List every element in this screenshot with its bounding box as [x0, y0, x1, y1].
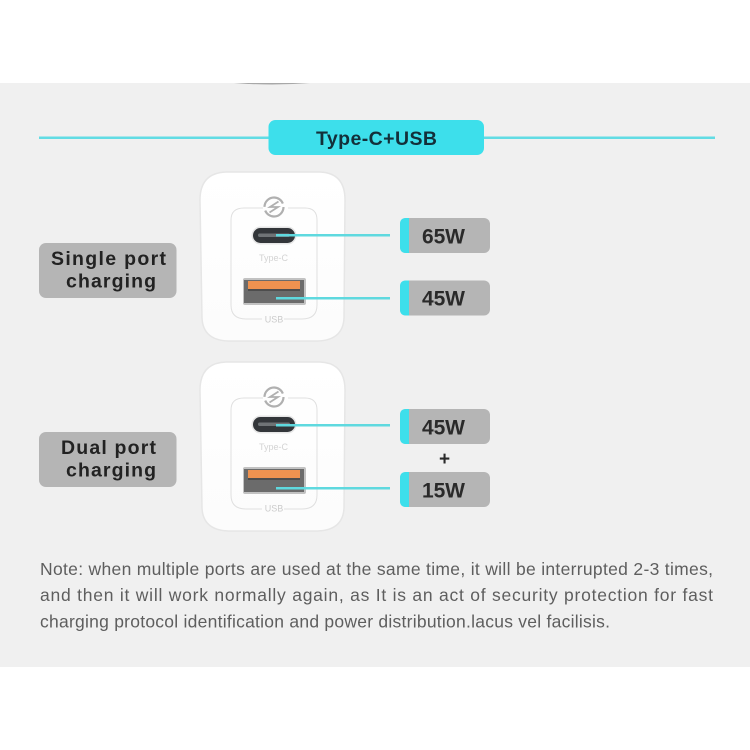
heading: Type-C+USB — [268, 120, 484, 155]
connector line: 15W dual — [276, 487, 390, 490]
badge: 45W dual: 45W — [422, 416, 465, 440]
port: Type-C — [252, 416, 296, 434]
badge: 15W dual — [400, 472, 490, 507]
port outline — [231, 398, 317, 509]
text: Type-C: Type-C — [259, 442, 289, 452]
charger edge remnant — [234, 83, 310, 84]
charger: dual port — [200, 362, 345, 531]
port: Type-C — [252, 226, 296, 244]
icon: brand logo — [264, 198, 284, 216]
badge: 65W: 65W — [422, 226, 465, 248]
text: Type-C: Type-C — [259, 253, 289, 263]
badge: 45W: 45W — [422, 288, 465, 310]
heading: Type-C+USB: Type-C+USB — [316, 128, 437, 150]
charger: single port — [200, 172, 345, 341]
badge: 45W dual — [400, 409, 490, 444]
label: Single port charging — [39, 243, 176, 298]
label: Single port charging: Single port — [51, 248, 166, 270]
text: USB: USB — [265, 314, 283, 324]
text: USB: USB — [265, 504, 283, 514]
port outline — [231, 208, 317, 319]
plus sign: + — [439, 449, 450, 470]
label: Dual port charging: Dual port — [61, 437, 156, 459]
connector line: 45W — [276, 297, 390, 300]
badge: 15W dual: 15W — [422, 480, 465, 502]
label: Single port charging: charging — [66, 270, 156, 292]
connector line: 45W dual — [276, 424, 390, 426]
port: USB — [243, 467, 306, 494]
label: Dual port charging: charging — [66, 460, 156, 482]
connector line: 65W — [276, 234, 390, 236]
icon: brand logo — [264, 388, 284, 406]
note text: Note: when multiple ports are used at the same time, it will be interrupted 2-3 times, — [40, 559, 713, 579]
note text: and then it will work normally again, as It is an act of security protection for fast — [40, 585, 713, 605]
badge: 65W — [400, 218, 490, 253]
badge: 45W — [400, 280, 490, 316]
port: USB — [243, 278, 306, 305]
background panel — [0, 83, 750, 667]
heading divider line — [39, 136, 715, 139]
note text — [40, 559, 713, 632]
note text: charging protocol identification and power distribution.lacus vel facilisis. — [40, 612, 610, 632]
label: Dual port charging — [39, 432, 176, 487]
